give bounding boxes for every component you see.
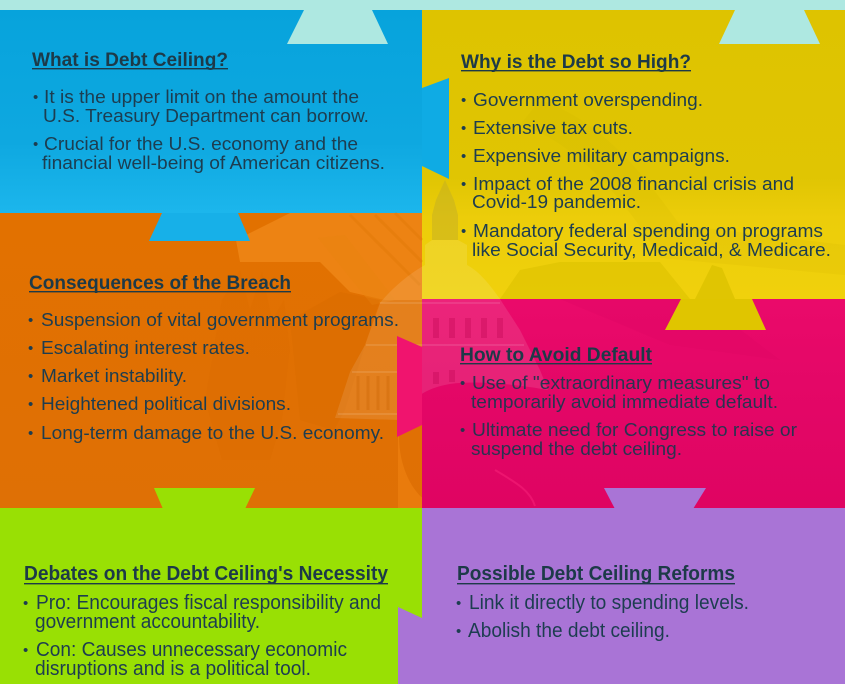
bullet list: Mandatory federal spending on programs bbox=[473, 220, 823, 241]
panel text: Debates on the Debt Ceiling's Necessity bbox=[23, 563, 389, 680]
bullet list: Covid-19 pandemic. bbox=[472, 191, 641, 212]
bullet list: Market instability. bbox=[41, 365, 187, 386]
arrow: purple tab into magenta bbox=[604, 488, 706, 509]
bullet list: Suspension of vital government programs. bbox=[41, 309, 399, 330]
bullet list: Expensive military campaigns. bbox=[473, 145, 730, 166]
bullet list bbox=[456, 592, 749, 642]
bullet list: • bbox=[28, 396, 33, 413]
bullet list: like Social Security, Medicaid, & Medicare. bbox=[472, 239, 831, 260]
money in magenta panel bbox=[560, 299, 780, 360]
bullet list: Escalating interest rates. bbox=[41, 337, 250, 358]
heading: Consequences of the Breach bbox=[29, 273, 291, 294]
bullet list: • bbox=[28, 368, 33, 385]
panel text: Why is the Debt so High bbox=[461, 52, 831, 260]
heading: Debates on the Debt Ceiling's Necessity bbox=[24, 563, 389, 585]
bullet list bbox=[28, 309, 399, 443]
background photo: money, hand, capitol dome and head bbox=[205, 100, 845, 508]
bullet list: suspend the debt ceiling. bbox=[471, 438, 682, 459]
hand in orange panel bbox=[205, 270, 290, 460]
bullet list: disruptions and is a political tool. bbox=[35, 658, 311, 680]
bullet list: Government overspending. bbox=[473, 89, 703, 110]
panel: blue background bbox=[0, 10, 422, 213]
bullet list: • bbox=[461, 176, 466, 193]
bullet list: • bbox=[23, 595, 28, 612]
money in yellow panel bbox=[500, 262, 690, 299]
top band bbox=[0, 0, 845, 10]
icon: capitol dome bbox=[335, 180, 548, 420]
bullet list: • bbox=[28, 312, 33, 329]
panel: orange background bbox=[0, 213, 422, 508]
bullet list: Extensive tax cuts. bbox=[473, 117, 633, 138]
panel text: Consequences of the Breach bbox=[28, 273, 399, 443]
bullet list: • bbox=[461, 223, 466, 240]
bullet list: • bbox=[28, 425, 33, 442]
bullet list: • bbox=[456, 623, 461, 640]
heading: How to Avoid Default bbox=[460, 345, 653, 366]
bullet list bbox=[23, 592, 381, 680]
bullet list: government accountability. bbox=[35, 611, 260, 633]
bullet list: Impact of the 2008 financial crisis and bbox=[473, 173, 794, 194]
bullet list: • bbox=[33, 89, 38, 106]
bullet list: It is the upper limit on the amount the bbox=[44, 86, 359, 107]
panel: purple background bbox=[422, 508, 845, 684]
bullet list: Con: Causes unnecessary economic bbox=[36, 639, 347, 661]
bullet list bbox=[460, 372, 797, 459]
bullet list: • bbox=[456, 595, 461, 612]
arrow: blue tab into yellow bbox=[422, 78, 449, 179]
panel text: What is Debt Ceiling bbox=[32, 50, 385, 173]
heading: What is Debt Ceiling? bbox=[32, 50, 228, 71]
bullet list: Abolish the debt ceiling. bbox=[468, 620, 670, 642]
bullet list: • bbox=[461, 148, 466, 165]
bullet list: • bbox=[23, 642, 28, 659]
arrow: blue tab into orange bbox=[149, 213, 250, 241]
bullet list: Pro: Encourages fiscal responsibility and bbox=[36, 592, 381, 614]
bullet list: • bbox=[461, 92, 466, 109]
panel: yellow background bbox=[422, 10, 845, 299]
arrow: magenta tab into orange bbox=[397, 336, 422, 437]
arrow: top-right mint tab bbox=[719, 10, 820, 44]
arrow: green tab into orange bbox=[154, 488, 255, 509]
bullet list: Crucial for the U.S. economy and the bbox=[44, 133, 358, 154]
panel text: How to Avoid Default bbox=[460, 345, 797, 459]
bullet list: Long-term damage to the U.S. economy. bbox=[41, 422, 384, 443]
arrow: yellow tab into magenta bbox=[665, 299, 766, 330]
bullet list: Use of "extraordinary measures" to bbox=[472, 372, 770, 393]
arrow: top-left mint tab bbox=[287, 10, 388, 44]
bullet list bbox=[461, 89, 831, 260]
icon: head outline bbox=[398, 436, 422, 508]
bullet list: • bbox=[460, 422, 465, 439]
heading: Possible Debt Ceiling Reforms bbox=[457, 563, 735, 585]
bullet list: Link it directly to spending levels. bbox=[469, 592, 749, 614]
panel: green background bbox=[0, 508, 422, 684]
bullet list bbox=[33, 86, 385, 173]
heading: Why is the Debt so High? bbox=[461, 52, 691, 73]
bullet list: Heightened political divisions. bbox=[41, 393, 291, 414]
bullet list: • bbox=[33, 136, 38, 153]
bullet list: financial well-being of American citizens. bbox=[42, 152, 385, 173]
bullet list: • bbox=[461, 120, 466, 137]
bullet list: temporarily avoid immediate default. bbox=[471, 391, 778, 412]
bullet list: • bbox=[28, 340, 33, 357]
panel: magenta background bbox=[422, 299, 845, 508]
arrow: purple tab into green bbox=[398, 607, 422, 684]
money in orange panel bbox=[236, 213, 422, 300]
panel text: Possible Debt Ceiling Reforms bbox=[456, 563, 749, 642]
bullet list: U.S. Treasury Department can borrow. bbox=[43, 105, 369, 126]
bullet list: • bbox=[460, 375, 465, 392]
bullet list: Ultimate need for Congress to raise or bbox=[472, 419, 797, 440]
